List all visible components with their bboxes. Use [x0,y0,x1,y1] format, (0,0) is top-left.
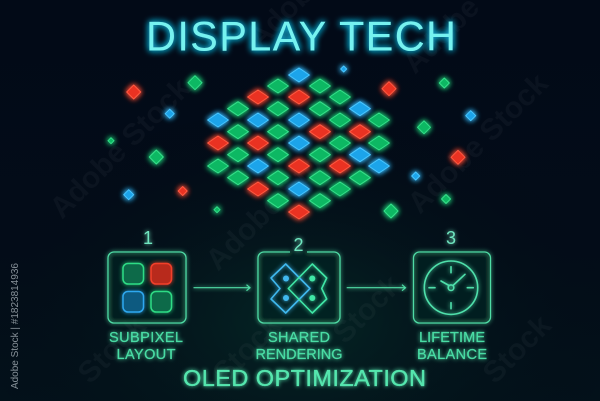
watermark: Adobe Stock [44,72,197,225]
step number 3: 3 [446,228,456,248]
arrow 1 [194,285,250,291]
label: lifetime balance: LIFETIME [419,330,485,346]
icon: clock [424,261,478,314]
watermark: Adobe Stock [200,124,353,277]
footer heading: OLED OPTIMIZATION [183,365,426,391]
step 1: subpixel layout [108,228,186,363]
label: shared rendering: RENDERING [256,347,342,363]
step 2: shared rendering [256,235,342,363]
label: shared rendering: SHARED [268,330,330,346]
watermark: Stock [327,269,408,350]
box 1 [108,252,186,323]
pixel diamond grid with scattered subpixels [108,66,476,219]
arrow 2 [347,285,406,291]
watermark: Adobe Stock [402,67,555,220]
label: subpixel layout: SUBPIXEL [109,330,183,346]
watermark: Stock [72,309,153,390]
label: subpixel layout: LAYOUT [116,347,176,363]
step 3: lifetime balance [414,228,490,363]
box 2 [258,252,340,323]
icon: four subpixels [123,264,172,312]
watermark: Stock [207,309,288,390]
title: DISPLAY TECH [146,12,456,60]
blue subpixels [124,66,476,200]
image id: Adobe Stock | #1823814936 [10,263,21,389]
box 3 [414,252,490,323]
green subpixels [108,76,450,218]
step number 2: 2 [293,235,304,255]
label: lifetime balance: BALANCE [417,347,487,363]
red subpixels [127,82,465,219]
step number 1: 1 [143,228,153,248]
watermark: Stock [477,309,558,390]
icon: shared diamonds [271,264,327,313]
